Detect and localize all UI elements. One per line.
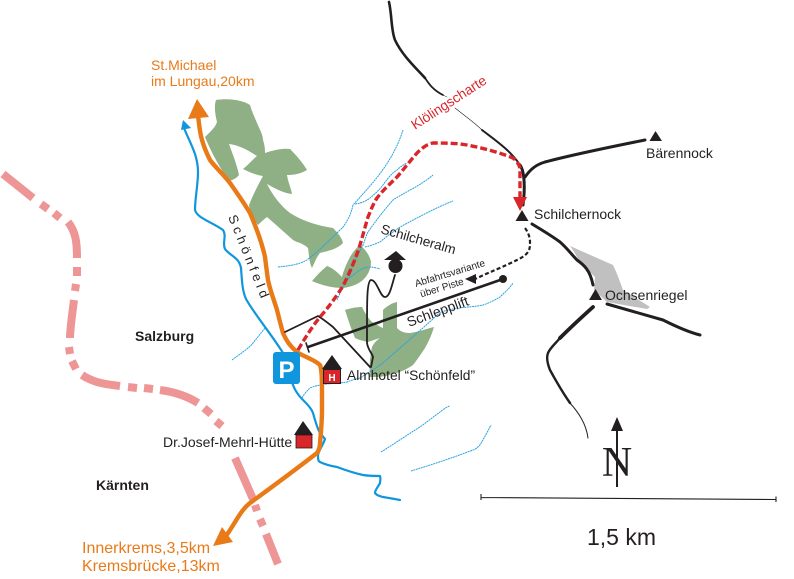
- label: Bärennock: Bärennock: [646, 145, 714, 161]
- label: Schilcheralm: Schilcheralm: [379, 221, 458, 257]
- arrow: road to Innerkrems: [213, 527, 233, 546]
- streams: [232, 130, 513, 471]
- arrow: river north: [181, 120, 191, 130]
- label: Abfahrtsvariante: Abfahrtsvariante: [414, 258, 487, 290]
- icon: Dr.Josef-Mehrl-Hütte: [294, 421, 313, 448]
- label: Klölingscharte: Klölingscharte: [408, 73, 490, 133]
- peak: Ochsenriegel: [589, 289, 602, 300]
- icon: Almhotel: [322, 355, 342, 384]
- label: Ochsenriegel: Ochsenriegel: [605, 287, 688, 303]
- icon: Schilcheralm hut: [384, 251, 406, 273]
- river Schönfeld: [184, 128, 400, 500]
- scale label: 1,5 km: [587, 524, 656, 550]
- label: St.Michael: St.Michael: [151, 57, 216, 73]
- label: Abfahrtsvariante: über Piste: [419, 276, 466, 300]
- scale bar: [481, 494, 776, 502]
- peak: Schilchernock: [516, 210, 528, 221]
- mountain ridges: [389, 2, 700, 438]
- icon: Almhotel: H: [328, 373, 336, 384]
- Abfahrtsvariante dotted route: [475, 228, 530, 279]
- arrow: Abfahrtsvariante: [465, 274, 476, 284]
- label: Salzburg: Salzburg: [135, 328, 194, 344]
- label: Almhotel: Almhotel “Schönfeld”: [347, 368, 475, 383]
- grey glacier area: [570, 246, 650, 309]
- label: Dr.Josef-Mehrl-Hütte: Dr.Josef-Mehrl-Hütte: [163, 434, 292, 450]
- north arrow: N: [602, 440, 632, 486]
- label: Schilchernock: Schilchernock: [534, 206, 622, 222]
- icon: parking: [273, 352, 300, 384]
- label: Innerkrems: Innerkrems,3,5km: [82, 540, 210, 557]
- label: Innerkrems: Kremsbrücke,13km: [82, 558, 220, 575]
- orange road: [198, 115, 322, 536]
- ski run to Schilcheralm and lift: [285, 275, 503, 367]
- label: Schönfeld: Schönfeld: [225, 213, 274, 303]
- province border: [3, 174, 278, 564]
- arrow: road to St.Michael: [188, 99, 209, 119]
- north arrow: [602, 417, 632, 487]
- label: St.Michael: im Lungau,20km: [151, 73, 255, 89]
- peak: Bärennock: [650, 131, 662, 141]
- forest areas: [205, 99, 434, 377]
- red route Klölingscharte: [298, 143, 520, 350]
- lift station: [499, 275, 507, 283]
- icon: parking: P: [278, 357, 295, 384]
- arrow: red route: [513, 197, 527, 211]
- label: Kärnten: Kärnten: [96, 477, 149, 493]
- label: Schlepplift: Schlepplift: [405, 293, 471, 330]
